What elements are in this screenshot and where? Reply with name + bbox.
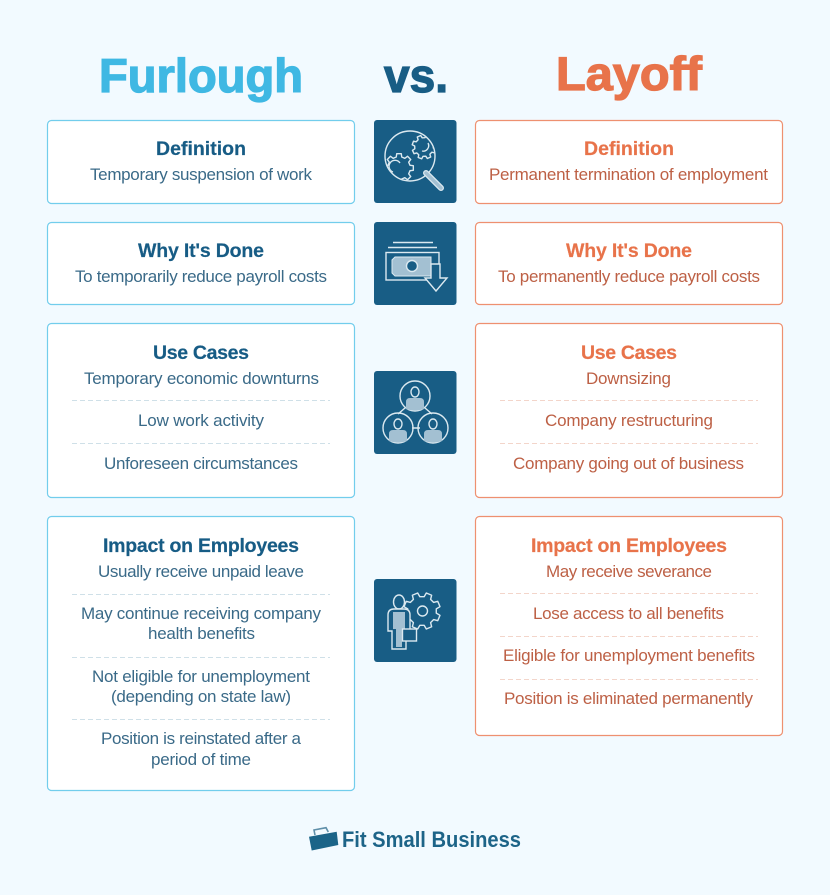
panel: furlough definition bbox=[48, 120, 354, 204]
panel: furlough use cases: Low work activity bbox=[138, 411, 264, 430]
panel: furlough use cases bbox=[48, 324, 354, 498]
panel: furlough definition: Definition bbox=[156, 138, 246, 160]
panel: layoff definition: Permanent termination of employment bbox=[489, 165, 768, 184]
panel: layoff use cases: Downsizing bbox=[586, 369, 671, 388]
panel: layoff use cases: Company restructuring bbox=[545, 411, 713, 430]
panel: furlough impact on employees: (depending on state law) bbox=[111, 687, 291, 706]
panel: layoff why it's done: Why It's Done bbox=[566, 240, 692, 262]
panel: furlough why it's done: To temporarily reduce payroll costs bbox=[75, 267, 327, 286]
panel: furlough impact on employees: Position is reinstated after a bbox=[101, 729, 302, 748]
panel: furlough impact on employees: period of time bbox=[151, 750, 251, 769]
panel: layoff why it's done bbox=[476, 222, 782, 304]
panel: layoff use cases bbox=[476, 324, 782, 498]
panel: furlough why it's done bbox=[48, 222, 354, 304]
panel: layoff impact on employees bbox=[476, 516, 782, 736]
heading: vs.: vs. bbox=[384, 49, 448, 102]
panel: furlough use cases: Use Cases bbox=[153, 342, 249, 364]
heading: Furlough: Furlough bbox=[99, 49, 303, 102]
panel: furlough definition: Temporary suspension of work bbox=[90, 165, 312, 184]
panel: layoff use cases: Use Cases bbox=[581, 342, 677, 364]
logo: Fit Small Business bbox=[309, 827, 521, 852]
icon: money stack with down arrow bbox=[374, 222, 456, 305]
panel: layoff use cases: Company going out of business bbox=[513, 454, 744, 473]
panel: layoff impact on employees: Lose access to all benefits bbox=[533, 604, 724, 623]
icon: briefcase bbox=[309, 828, 338, 850]
panel: layoff impact on employees: Position is eliminated permanently bbox=[504, 689, 754, 708]
panel: furlough impact on employees: health benefits bbox=[148, 624, 255, 643]
panel: layoff impact on employees: Eligible for unemployment benefits bbox=[503, 646, 755, 665]
panel: furlough impact on employees: Usually receive unpaid leave bbox=[98, 562, 304, 581]
icon: magnifying glass with gears bbox=[374, 120, 456, 203]
panel: layoff impact on employees: Impact on Employees bbox=[531, 535, 727, 557]
panel: furlough use cases: Temporary economic downturns bbox=[84, 369, 319, 388]
heading: Layoff: Layoff bbox=[556, 47, 702, 100]
icon: connected people network bbox=[374, 371, 456, 454]
logo wordmark: Fit Small Business bbox=[342, 827, 521, 852]
icon: person with gear bbox=[374, 579, 456, 662]
panel: layoff definition bbox=[476, 120, 782, 204]
panel: furlough impact on employees: Impact on Employees bbox=[103, 535, 299, 557]
panel: furlough impact on employees: May continue receiving company bbox=[81, 604, 322, 623]
panel: furlough use cases: Unforeseen circumstances bbox=[104, 454, 298, 473]
panel: layoff impact on employees: May receive severance bbox=[546, 562, 712, 581]
panel: furlough impact on employees bbox=[48, 516, 354, 790]
panel: furlough why it's done: Why It's Done bbox=[138, 240, 264, 262]
panel: layoff definition: Definition bbox=[584, 138, 674, 160]
panel: layoff why it's done: To permanently reduce payroll costs bbox=[498, 267, 760, 286]
panel: furlough impact on employees: Not eligible for unemployment bbox=[92, 667, 310, 686]
